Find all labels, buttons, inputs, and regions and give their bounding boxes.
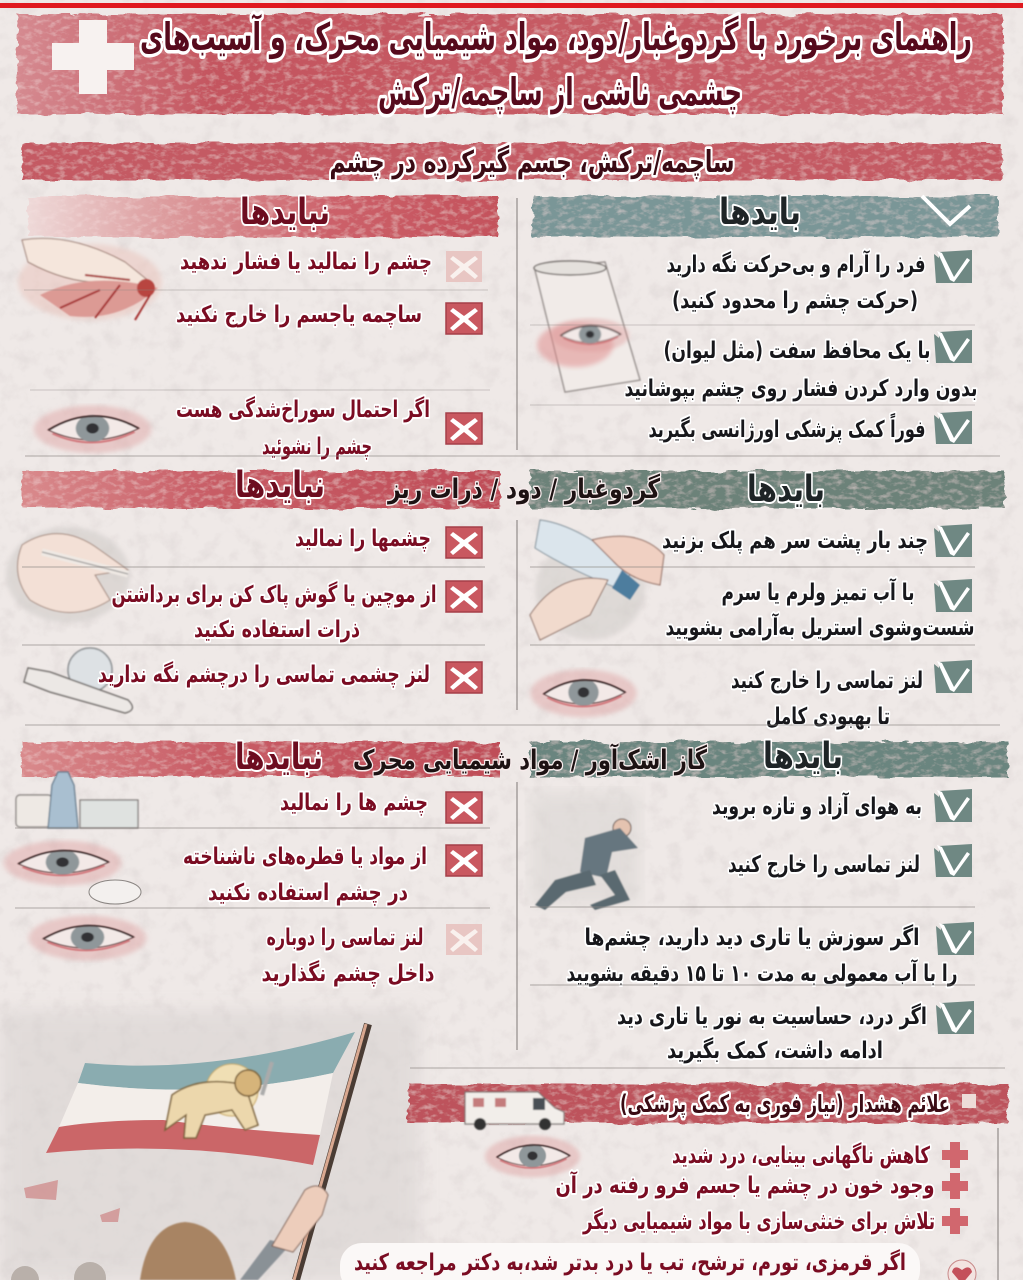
- title banner: [17, 13, 1003, 114]
- check icon: [934, 789, 972, 822]
- x icon: [446, 527, 482, 558]
- don'ts header band: [28, 192, 498, 237]
- row text: چند بار پشت سر هم پلک بزنید: [662, 528, 928, 554]
- row text: لنز تماسی را خارج کنید: [731, 668, 923, 694]
- small distant flags: [24, 1180, 120, 1222]
- illustration: red eye: [485, 1136, 580, 1177]
- illustration: rinsing eye with water bottle: [530, 520, 664, 640]
- illustration: eye: [29, 916, 146, 960]
- do row: seek help: [617, 1001, 974, 1064]
- row text: [666, 249, 926, 314]
- row text: [566, 924, 958, 987]
- don't row: no contact lens: [98, 661, 482, 693]
- row text: اگر احتمال سوراخ‌شدگی هست: [176, 396, 430, 423]
- row text: با یک محافظ سفت (مثل لیوان): [664, 338, 930, 364]
- row text: لنز تماسی را خارج کنید: [728, 852, 920, 878]
- don't row: do not wash: [176, 396, 482, 460]
- do row: remove lens: [728, 844, 972, 878]
- illustration: hand with tweezers: [6, 527, 130, 623]
- faded x icon: [446, 924, 482, 955]
- row text: ذرات استفاده نکنید: [194, 617, 360, 643]
- flag emblem: lion and sun: [165, 1062, 272, 1138]
- section 1 heading: ساچمه/ترکش، جسم گیرکرده در چشم: [330, 144, 734, 180]
- don't row: do not rub: [295, 526, 482, 558]
- row text: چشم ها را نمالید: [280, 790, 428, 816]
- check icon: [934, 250, 972, 283]
- row text: با آب تمیز ولرم یا سرم: [722, 577, 914, 606]
- section 2 heading: گردوغبار / دود / ذرات ریز: [386, 473, 660, 505]
- check icon: [934, 660, 972, 693]
- title text: چشمی ناشی از ساچمه/ترکش: [378, 70, 742, 114]
- warning banner: [408, 1084, 1008, 1123]
- do row: rinse: [666, 577, 974, 641]
- panel: section 3 don'ts: [4, 772, 482, 987]
- row text: [176, 396, 430, 460]
- row text: از مواد یا قطره‌های ناشناخته: [183, 844, 427, 870]
- icon: ambulance: [465, 1092, 564, 1130]
- row text: [731, 668, 923, 730]
- flag pole: [296, 1024, 368, 1280]
- section 2 dos heading: بایدها: [747, 469, 825, 510]
- callout: see a doctor: [340, 1243, 920, 1280]
- don't row: do not remove: [176, 302, 482, 334]
- x icon: [446, 581, 482, 612]
- section 1 banner: pellets and shrapnel: [22, 143, 1002, 180]
- row text: [183, 844, 427, 906]
- row text: چشم را نمالید یا فشار ندهید: [180, 249, 432, 275]
- do row: cover with shield: [624, 330, 978, 402]
- section 3 banner: tear gas and chemicals: [22, 736, 1008, 778]
- illustration: hand rubbing injured eye: [18, 238, 162, 320]
- check icon: [934, 411, 972, 444]
- title text: [140, 13, 972, 114]
- section 3 heading: گاز اشک‌آور / مواد شیمیایی محرک: [353, 743, 707, 776]
- check icon: [934, 330, 972, 363]
- row text: لنز چشمی تماسی را درچشم نگه ندارید: [98, 661, 430, 688]
- row text: داخل چشم نگذارید: [262, 960, 435, 987]
- x icon: [446, 662, 482, 693]
- row text: در چشم استفاده نکنید: [208, 880, 408, 906]
- don't row: do not rub: [280, 790, 482, 823]
- x icon: [446, 303, 482, 334]
- row text: اگر درد، حساسیت به نور یا تاری دید: [617, 1003, 927, 1030]
- don't row: no unknown drops: [183, 844, 482, 906]
- row text: تا بهبودی کامل: [766, 704, 890, 730]
- plus icon: [942, 1142, 968, 1168]
- section 2 banner: dust and smoke: [22, 465, 1005, 510]
- protester hair, arm and hand: [140, 1186, 328, 1280]
- check icon: [936, 922, 974, 955]
- row text: [617, 1003, 927, 1064]
- don't row: no tweezers: [112, 581, 482, 643]
- icon: white medical cross: [52, 20, 134, 94]
- x icon: [446, 845, 482, 876]
- plus icon: [942, 1173, 968, 1199]
- do row: seek care: [648, 411, 972, 444]
- illustration: irritated eye: [34, 405, 151, 453]
- warning item: neutralising attempt: [582, 1208, 968, 1235]
- section 3 dos heading: بایدها: [763, 736, 843, 777]
- warning item: blood or embedded object: [556, 1170, 968, 1199]
- row text: چشمها را نمالید: [295, 526, 431, 552]
- illustration: protester with lion and sun flag: [11, 1024, 368, 1280]
- dos header band: [532, 192, 998, 237]
- do row: rinse 10-15 minutes: [566, 922, 974, 987]
- faded x icon: [446, 251, 482, 282]
- crowd: [11, 1262, 106, 1280]
- don't row: no lens reinsertion: [262, 924, 482, 987]
- panel: section 1 dos: [532, 192, 998, 444]
- illustration: contact lens on applicator: [24, 648, 132, 713]
- x icon: [446, 792, 482, 823]
- row text: به هوای آزاد و تازه بروید: [712, 791, 922, 820]
- row text: [112, 581, 436, 643]
- illustration: eye: [530, 669, 637, 717]
- row text: ادامه داشت، کمک بگیرید: [667, 1037, 883, 1064]
- panel: section 3 dos: [530, 789, 974, 1064]
- row text: از موچین یا گوش پاک کن برای برداشتن: [112, 581, 436, 608]
- illustration: glass shield over eye: [534, 261, 640, 392]
- plus icon: [942, 1208, 968, 1234]
- illustration: bottles and gauze: [16, 772, 138, 828]
- do row: keep still: [666, 249, 972, 314]
- illustration: person running from gas: [530, 792, 640, 910]
- x icon: [446, 413, 482, 444]
- section 2 don'ts heading: نبایدها: [235, 465, 325, 506]
- check icon: [934, 844, 972, 877]
- check icon: [934, 524, 972, 557]
- row text: اگر سوزش یا تاری دید دارید، چشم‌ها: [584, 924, 920, 951]
- row text: لنز تماسی را دوباره: [266, 925, 424, 951]
- row text: [666, 577, 974, 641]
- panel: section 2 don'ts: [6, 526, 482, 713]
- do row: fresh air: [712, 789, 972, 822]
- row text: چشم را نشوئید: [262, 434, 372, 460]
- dos header band: بایدها: [719, 192, 801, 233]
- panel: warning signs: [340, 1084, 1008, 1280]
- don't row: do not rub: [180, 249, 482, 282]
- do row: blink: [662, 524, 972, 557]
- illustration: eye with cotton pad: [4, 841, 141, 904]
- do row: remove lens: [731, 660, 972, 730]
- item text: کاهش ناگهانی بینایی، درد شدید: [672, 1142, 930, 1169]
- panel: section 1 don'ts: [18, 192, 498, 460]
- check icon: [936, 1001, 974, 1034]
- panel: section 2 dos: [530, 520, 974, 730]
- section 3 don'ts heading: نبایدها: [235, 737, 323, 778]
- check icon: [934, 579, 972, 612]
- row text: (حرکت چشم را محدود کنید): [672, 288, 918, 314]
- don'ts header band: نبایدها: [240, 192, 330, 233]
- icon: red heart badge: [948, 1260, 976, 1280]
- warning item: vision loss: [672, 1142, 968, 1169]
- row text: فرد را آرام و بی‌حرکت نگه دارید: [666, 249, 926, 278]
- row text: [262, 925, 435, 987]
- row text: ساچمه یاجسم را خارج نکنید: [176, 302, 422, 328]
- row text: [624, 338, 978, 402]
- row text: را با آب معمولی به مدت ۱۰ تا ۱۵ دقیقه بشویید: [566, 958, 958, 987]
